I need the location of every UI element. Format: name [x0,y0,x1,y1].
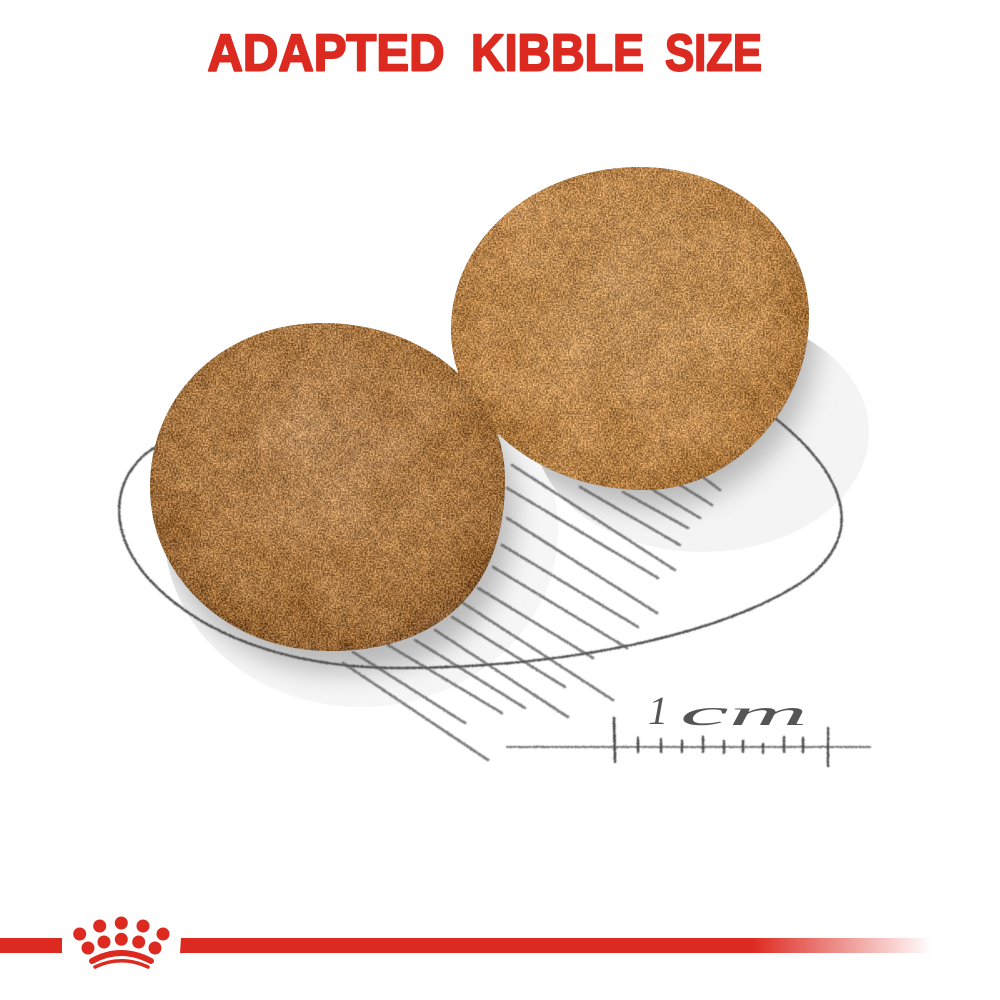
kibble: left [150,323,505,651]
pencil ellipse outline [119,418,842,668]
title [208,24,762,82]
shadow: left kibble [166,433,558,707]
icon: royal crown logo [73,916,170,967]
scale label: 1cm: 1 [648,688,668,733]
shadow: right kibble [542,339,869,552]
kibble: right [451,167,809,490]
scale ruler [507,718,870,766]
title: ADAPTED [208,24,444,82]
pencil hatching [343,465,720,760]
title: KIBBLE [471,24,644,82]
footer bar: left segment [0,938,62,953]
scale label: 1cm: cm [680,693,808,733]
footer bar: right fading segment [180,938,932,953]
scale label: 1cm [648,688,808,733]
title: SIZE [665,24,762,82]
